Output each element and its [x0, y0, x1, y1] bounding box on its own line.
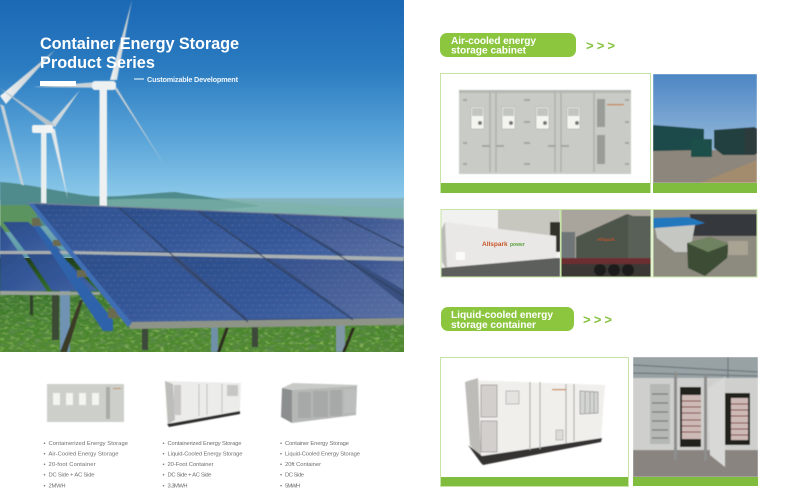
left back panels	[3, 222, 62, 251]
title accent bar	[40, 81, 76, 86]
spec list: product 2: Containerized Energy Storage	[168, 441, 242, 447]
photo: open container with battery racks	[633, 357, 758, 486]
front row modules	[72, 254, 245, 322]
spec list: product 1	[44, 441, 128, 490]
spec list: product 3: •	[280, 484, 282, 490]
truck container logo: Allspark	[597, 237, 615, 242]
section header: air-cooled	[440, 33, 576, 57]
section header: liquid-cooled: Liquid-cooled energy	[451, 310, 553, 321]
product 1: air-cooled unit thumbnail	[47, 384, 124, 422]
sky	[0, 0, 404, 200]
wind turbine middle	[0, 88, 80, 213]
card: liquid-cooled container product	[440, 358, 628, 486]
section header: liquid-cooled	[441, 307, 574, 331]
spec list: product 3: Liquid-Cooled Energy Storage	[285, 452, 360, 458]
aluminium frames	[68, 251, 404, 261]
title: Product Series	[40, 54, 155, 72]
container logo: power	[510, 242, 525, 248]
container logo: Allspark	[482, 241, 508, 248]
photo: dark container on truck	[561, 209, 651, 277]
spec list: product 2: 20-Foot Container	[168, 462, 214, 468]
spec list: product 3: •	[280, 452, 282, 458]
spec list: product 2: 3.3MWH	[168, 484, 188, 490]
support posts	[60, 280, 70, 352]
spec list: product 1: Containerized Energy Storage	[48, 441, 128, 447]
spec list: product 3: •	[280, 441, 282, 447]
photo: site installation with green strip	[653, 74, 757, 193]
border: gallery row	[441, 210, 757, 277]
card: air-cooled cabinet product	[440, 74, 650, 193]
title: Container Energy Storage	[40, 35, 239, 53]
spec list: product 1: 2MWH	[48, 484, 66, 490]
product 3: 5MWh container thumbnail	[281, 383, 358, 423]
photo: white Allspark container	[441, 209, 560, 277]
subtitle: Customizable Development	[147, 75, 239, 84]
spec list: product 2	[162, 441, 242, 490]
hero photo: wind turbines and solar panels	[0, 0, 404, 352]
spec list: product 2: DC Side + AC Side	[168, 472, 212, 478]
spec list: product 3: DC Side	[285, 472, 304, 478]
spec list: product 1: DC Side + AC Side	[48, 472, 94, 478]
liquid-cooled unit illustration	[465, 378, 605, 465]
cabinet illustration	[459, 90, 631, 174]
distant hills and landscape	[0, 182, 404, 258]
spec list: product 2: •	[162, 462, 165, 468]
spec list: product 2: •	[162, 484, 165, 490]
wind turbine far left	[0, 50, 55, 186]
photo: site with blue roof and green cabinet	[653, 209, 757, 277]
title	[40, 35, 239, 72]
mounting brackets	[32, 218, 120, 318]
spec list: product 2: Liquid-Cooled Energy Storage	[168, 452, 242, 458]
spec list: product 1: •	[44, 484, 46, 490]
spec list: product 3: 20ft Container	[285, 462, 321, 468]
container logo	[482, 242, 525, 248]
array backing	[76, 209, 404, 322]
arrows: air-cooled: >>>	[586, 38, 615, 53]
spec list: product 1: •	[44, 441, 46, 447]
spec list: product 1: •	[44, 462, 46, 468]
spec list: product 2: •	[162, 441, 165, 447]
spec list: product 1: 20-foot Container	[48, 462, 96, 468]
solar panel array	[0, 203, 404, 352]
section header: liquid-cooled: storage container	[451, 320, 536, 331]
blue support rail	[32, 224, 113, 331]
wind turbine large	[33, 0, 165, 208]
spec list: product 3: Container Energy Storage	[285, 441, 349, 447]
back row modules	[28, 203, 165, 251]
spec list: product 3	[280, 441, 360, 490]
spec list: product 3: 5MWH	[285, 484, 300, 490]
arrows: liquid-cooled: >>>	[583, 312, 612, 327]
spec list: product 1: Air-Cooled Energy Storage	[48, 452, 118, 458]
section header: air-cooled: Air-cooled energy	[451, 36, 536, 47]
spec list: product 3: •	[280, 472, 282, 478]
spec list: product 3: •	[280, 462, 282, 468]
product 2: liquid-cooled unit thumbnail	[165, 381, 241, 427]
grass field	[0, 258, 404, 352]
spec list: product 2: •	[162, 452, 165, 458]
section header: air-cooled: storage cabinet	[451, 46, 527, 56]
spec list: product 1: •	[44, 472, 46, 478]
spec list: product 2: •	[162, 472, 165, 478]
spec list: product 1: •	[44, 452, 46, 458]
